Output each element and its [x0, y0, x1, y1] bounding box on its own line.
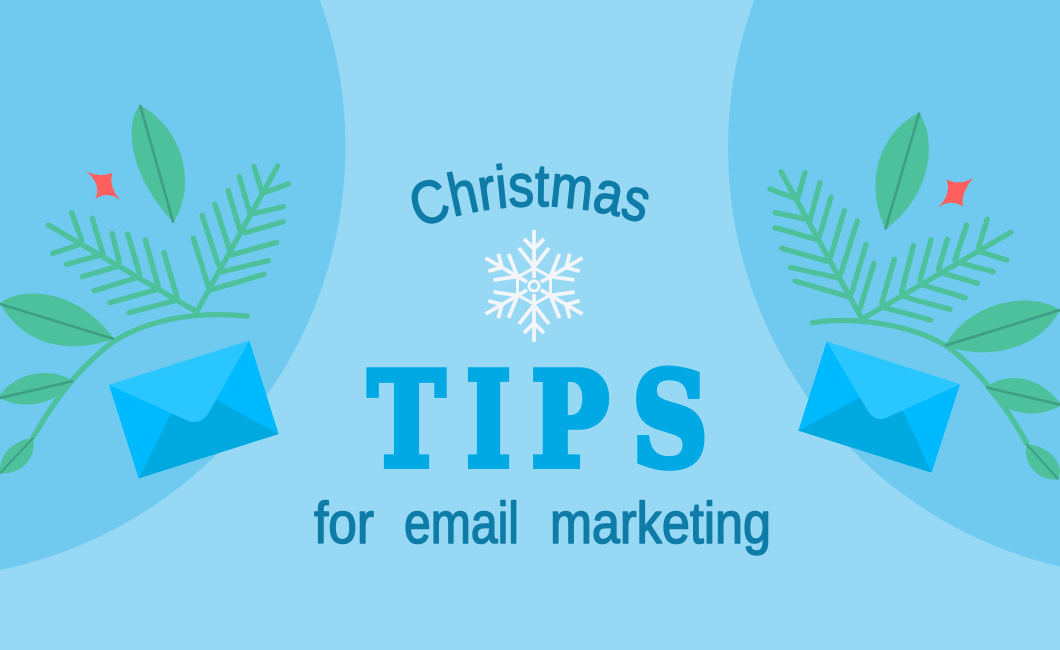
right top leaf [875, 113, 929, 229]
right middle leaf [986, 378, 1060, 413]
heading: TIPS: P [531, 344, 609, 496]
left envelope [109, 341, 279, 478]
subheading: for email marketing: marketing [550, 491, 771, 556]
subheading: for email marketing: for [314, 491, 374, 556]
heading: TIPS: I [466, 344, 511, 496]
left pine twig one [48, 213, 197, 313]
icon: snowflake [478, 230, 590, 342]
subheading: for email marketing: email [404, 491, 519, 556]
left top leaf [132, 105, 185, 223]
right stem [812, 321, 1027, 443]
heading: TIPS: S [632, 344, 708, 496]
heading: Christmas: Christmas [412, 163, 649, 224]
left background circle [0, 0, 346, 579]
heading: TIPS [368, 344, 708, 496]
subheading: for email marketing [314, 491, 771, 556]
right background circle [728, 0, 1060, 578]
left red star [86, 171, 121, 201]
right small leaf [1026, 444, 1060, 480]
right pine twig two [863, 219, 1011, 320]
right red star [938, 178, 973, 208]
left decoration [0, 105, 288, 478]
left middle leaf [0, 373, 73, 405]
right envelope [798, 342, 960, 473]
right large leaf [945, 300, 1060, 352]
left small leaf [0, 438, 34, 473]
right decoration [770, 113, 1060, 480]
right pine twig one [770, 172, 874, 318]
heading: TIPS: T [368, 344, 445, 496]
left pine twig two [193, 166, 288, 312]
left stem [33, 315, 247, 437]
left large leaf [0, 293, 114, 346]
